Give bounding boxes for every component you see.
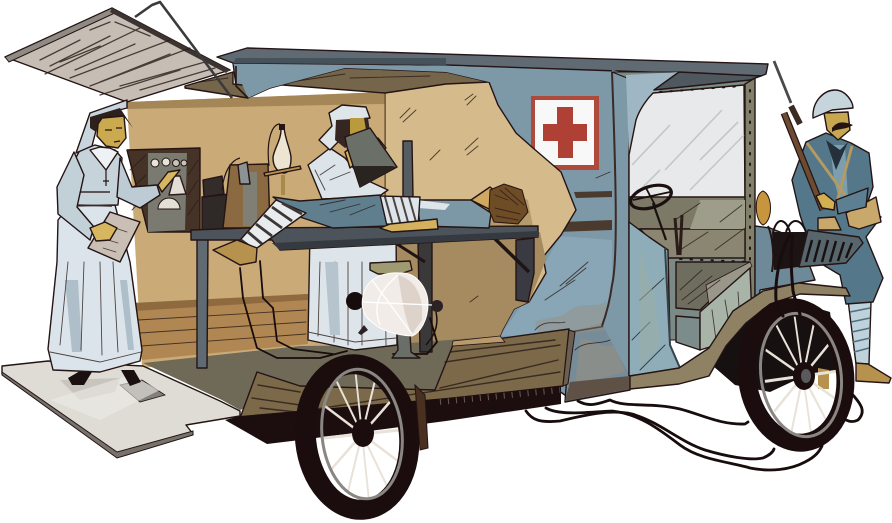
shoes (68, 371, 92, 385)
rivets along the frame (749, 90, 751, 330)
first nurse (48, 100, 186, 386)
top frame shadow (654, 72, 761, 90)
floor (143, 336, 500, 410)
window glass (629, 85, 745, 198)
khaki door panel (629, 197, 745, 229)
glass x-ray bulb on stand (264, 124, 301, 195)
door frame and window (602, 70, 761, 376)
hair (90, 108, 133, 132)
bodice (64, 145, 122, 206)
interior walls (127, 68, 576, 410)
table legs (197, 238, 208, 368)
black chassis (225, 386, 561, 444)
x-ray lamp globe (346, 261, 443, 358)
arm (380, 219, 438, 232)
face and hair (335, 118, 370, 148)
curved door surround (626, 72, 679, 155)
lower cab panels (629, 222, 752, 376)
upper blue side of the van (233, 63, 630, 402)
flask (169, 176, 186, 195)
torso bandages (378, 196, 420, 226)
hood cables (776, 235, 800, 318)
ceiling wood (185, 68, 489, 98)
steering wheel and column (628, 181, 682, 255)
wood side panel (240, 322, 630, 420)
roof (217, 48, 768, 98)
rifle (774, 61, 791, 103)
rear wheel (298, 359, 428, 515)
engine and radiator (755, 191, 863, 340)
front fender (630, 283, 850, 389)
helmet (813, 90, 853, 118)
patient on the table (213, 184, 528, 265)
face (97, 116, 126, 148)
soldier (774, 61, 891, 383)
skirt (308, 230, 397, 350)
step platform (2, 361, 240, 458)
upright rod (403, 141, 413, 197)
seat box (676, 262, 750, 310)
raised arm (117, 158, 160, 208)
radiator (799, 230, 863, 267)
hub (352, 419, 374, 447)
body rail strips (574, 191, 612, 198)
spokes (315, 365, 409, 503)
lower blue body panel (500, 236, 612, 336)
lab apparatus (202, 124, 280, 232)
boot seen through spokes (818, 368, 829, 389)
dark underside of front wing (713, 300, 838, 392)
fluoroscope box (345, 128, 397, 187)
boots (213, 240, 257, 265)
right side wall (345, 68, 576, 350)
skirt (48, 205, 142, 372)
trousers (273, 195, 387, 228)
shirt (417, 200, 491, 228)
blouse (308, 148, 388, 199)
second nurse (308, 105, 397, 350)
veil (76, 100, 127, 153)
coat (792, 133, 883, 304)
table top (191, 226, 538, 250)
equipment panel (127, 148, 200, 232)
sleeve (836, 188, 868, 214)
lowered arm (57, 152, 94, 240)
bandaged leg (848, 300, 871, 364)
wood wainscot (133, 294, 308, 360)
hands (345, 144, 360, 168)
clipboard (88, 212, 140, 262)
lower wall shadow (385, 232, 546, 348)
attic flap raised (5, 2, 232, 102)
examination table (191, 226, 538, 368)
hand on clipboard (90, 222, 117, 241)
front wheel (738, 301, 854, 449)
hands (816, 193, 835, 210)
right window post (745, 78, 755, 340)
face (824, 112, 850, 140)
straps (807, 143, 852, 205)
prop strut (135, 2, 232, 98)
hand at flask (158, 170, 180, 192)
dials (151, 159, 159, 167)
satchel (846, 197, 881, 229)
door pillar (603, 70, 630, 376)
red cross sign (531, 96, 599, 170)
light blue cab door (629, 222, 680, 376)
head (471, 187, 500, 212)
interior cables (240, 261, 437, 358)
veil and cap (319, 105, 370, 150)
back wall (127, 92, 385, 368)
floor cables behind the van (526, 394, 862, 470)
bandaged leg (233, 200, 306, 248)
boot (856, 363, 891, 383)
